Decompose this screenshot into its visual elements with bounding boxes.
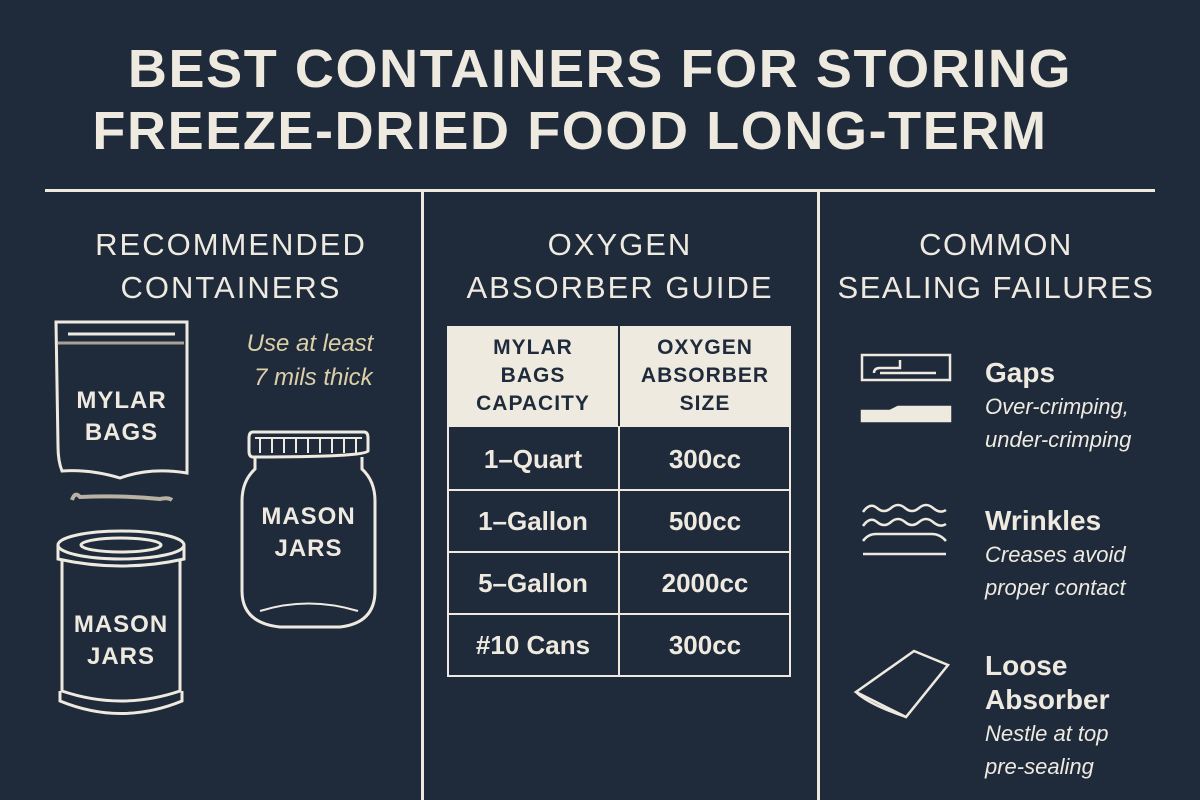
text: wrinkles [984,505,1126,600]
table header: CAPACITY [476,392,590,415]
heading: sealing: SEALING FAILURES [838,270,1154,305]
table header: OXYGEN [657,336,753,359]
table rows: 300cc [669,444,741,474]
table header: ABSORBER [641,364,769,387]
label: mylar bags: BAGS [85,419,158,446]
table rows: 5–Gallon [478,568,588,598]
text: wrinkles: proper contact [985,575,1126,600]
table rows: 300cc [669,630,741,660]
text: loose absorber: Absorber [985,684,1109,715]
heading: recommended: CONTAINERS [121,270,341,305]
text: gaps [985,357,1132,452]
heading: oxygen: ABSORBER GUIDE [466,270,774,305]
heading: oxygen [466,227,774,305]
table header: MYLAR [493,336,573,359]
heading: sealing [838,227,1154,305]
heading: recommended [95,227,367,305]
label: mason jars jar [261,503,356,562]
table rows: 2000cc [662,568,748,598]
panel: sealing failures [838,227,1154,779]
text: loose absorber: pre-sealing [985,754,1094,779]
table rows: 1–Quart [484,444,582,474]
icons: containers [54,320,376,715]
label: mason jars jar: JARS [274,535,343,562]
label: mylar bags: MYLAR [76,387,167,414]
panel: recommended containers [54,227,376,715]
icon: gaps [860,354,952,422]
table [447,326,791,677]
table header: SIZE [680,392,730,415]
text: gaps: Over-crimping, [985,394,1129,419]
heading: oxygen: OXYGEN [548,227,692,262]
label: mason jars can [74,611,168,670]
label: mason jars can: MASON [74,611,168,638]
table rows: #10 Cans [476,630,590,660]
note: thickness: 7 mils thick [254,364,373,391]
panel: oxygen absorber guide [447,227,791,677]
title: FREEZE-DRIED FOOD LONG-TERM [92,101,1048,161]
text: loose absorber: Loose [985,650,1067,681]
table header: BAGS [501,364,565,387]
label: mason jars jar: MASON [261,503,356,530]
heading: sealing: COMMON [919,227,1073,262]
table rows: 500cc [669,506,741,536]
table rows: 1–Gallon [478,506,588,536]
text: gaps: under-crimping [985,427,1131,452]
text: gaps: Gaps [985,357,1055,388]
text: wrinkles: Creases avoid [985,542,1126,567]
text: loose absorber [984,650,1110,779]
icon: loose absorber [854,650,950,719]
table rows [476,444,748,660]
icon: wrinkles [862,504,947,556]
note: thickness: Use at least [247,330,373,357]
title [92,39,1072,161]
note: thickness [247,330,374,391]
text: wrinkles: Wrinkles [985,505,1101,536]
title: BEST CONTAINERS FOR STORING [128,39,1072,99]
heading: recommended: RECOMMENDED [95,227,367,262]
table header [476,336,769,415]
text: loose absorber: Nestle at top [985,721,1109,746]
label: mylar bags [76,387,167,446]
label: mason jars can: JARS [87,643,155,670]
